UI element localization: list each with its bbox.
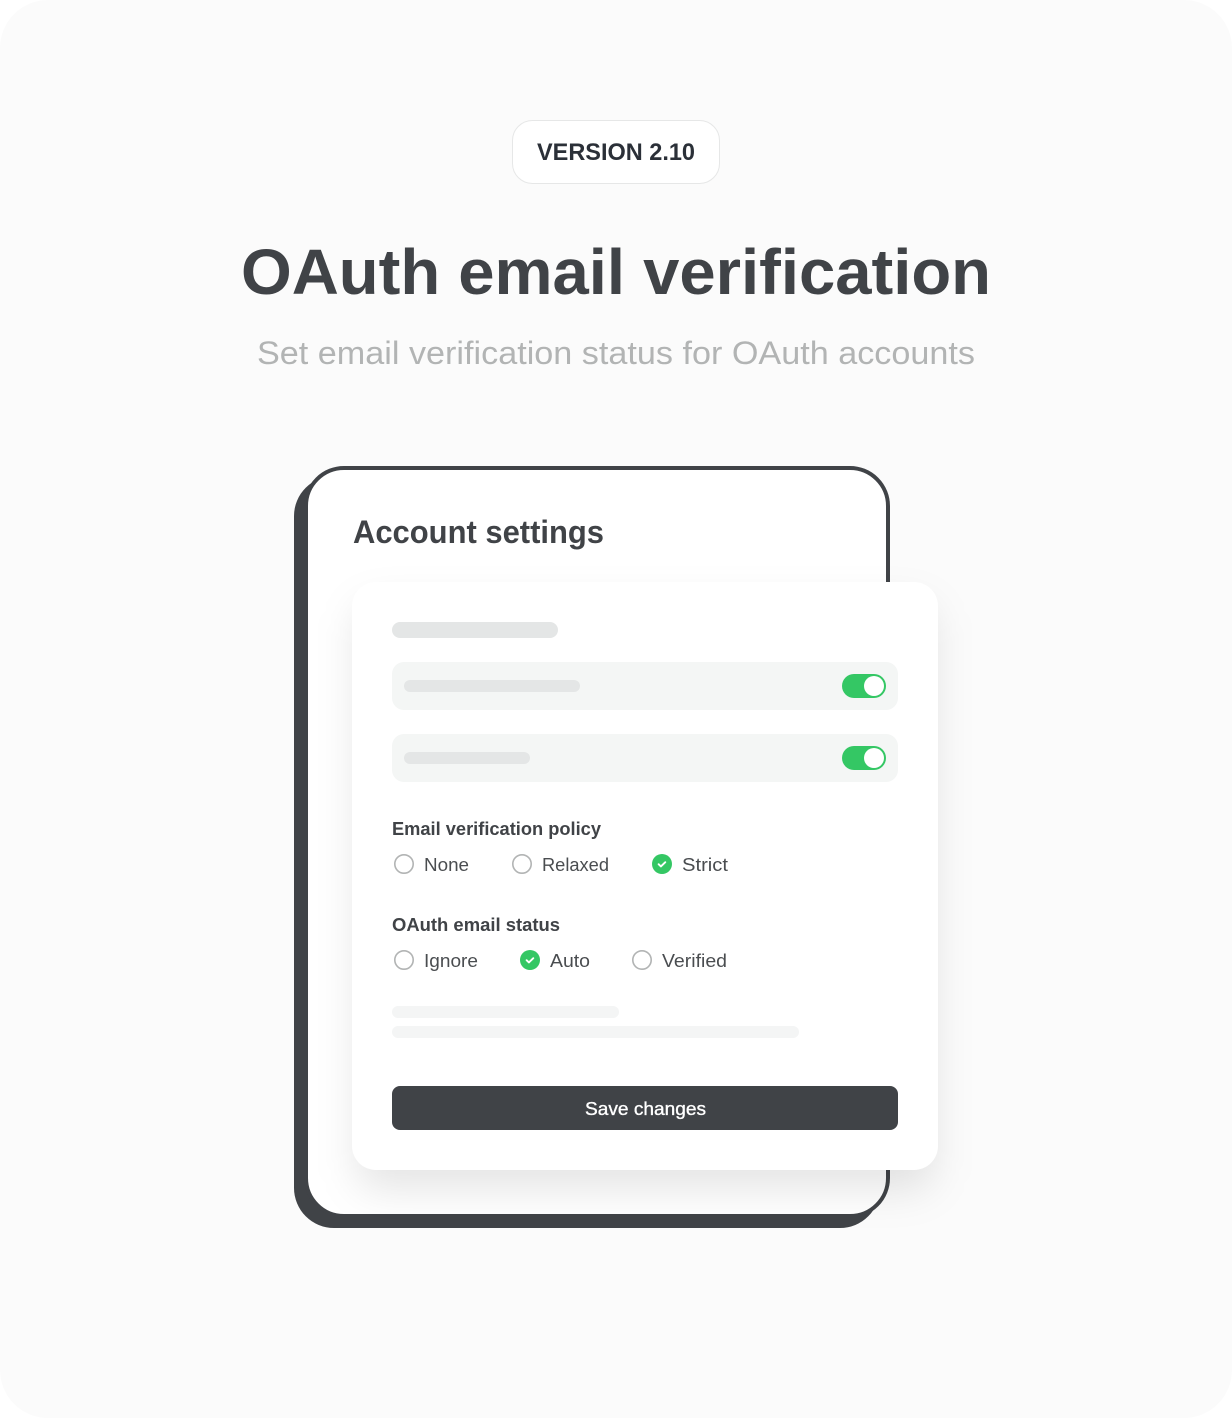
save button: [392, 1086, 898, 1130]
settings panel: [352, 582, 938, 1190]
subtitle: Set email verification status for OAuth accounts: [257, 335, 975, 371]
oauth email status group: Ignore: [424, 951, 478, 971]
email verification policy group: Strict: [682, 855, 728, 875]
version badge: VERSION 2.10: [537, 139, 695, 166]
back card: [294, 476, 880, 1228]
save button: Save changes: [585, 1099, 706, 1119]
placeholder heading: [392, 622, 558, 638]
toggle row 2: [392, 734, 898, 782]
oauth email status group: Verified: [662, 951, 727, 971]
email verification policy group: [392, 819, 728, 875]
placeholder description: [392, 1006, 799, 1038]
oauth email status group: OAuth email status: [392, 915, 560, 935]
toggle row 1: [392, 662, 898, 710]
version badge: [512, 120, 720, 184]
email verification policy group: Email verification policy: [392, 819, 601, 839]
illustration: settings window: [294, 468, 938, 1228]
oauth email status group: [392, 915, 727, 971]
email verification policy group: Relaxed: [542, 855, 609, 875]
title: OAuth email verification: [241, 236, 991, 308]
email verification policy group: None: [424, 855, 469, 875]
front card: [306, 468, 888, 1216]
panel surface: [352, 582, 938, 1170]
panel shadow: [356, 604, 934, 1190]
oauth email status group: Auto: [550, 951, 590, 971]
window heading: Account settings: [353, 514, 604, 550]
